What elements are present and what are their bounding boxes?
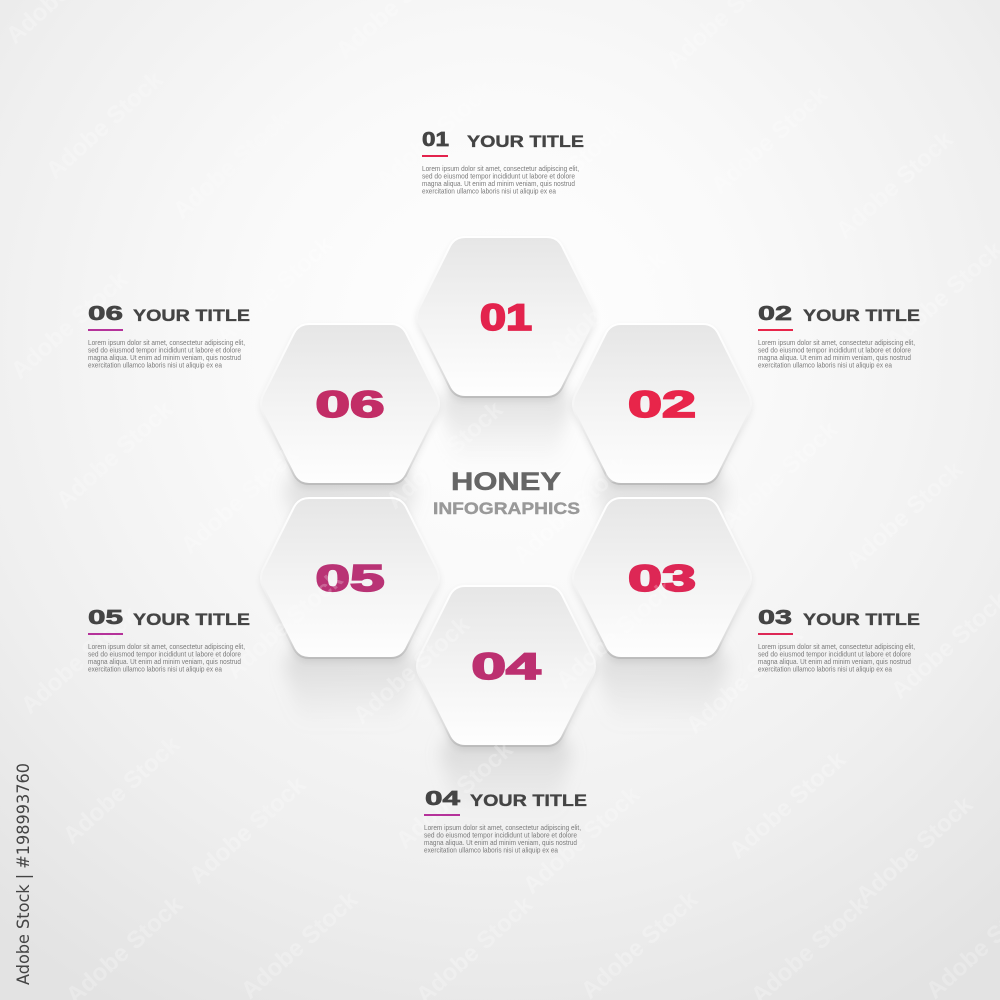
watermark pattern: Adobe Stock [544,246,672,364]
text block 05: Lorem ipsum dolor sit amet, consectetur adipiscing elit, [88,642,245,651]
text block 03 [758,607,920,674]
hexagon 06: 06 [316,384,384,425]
watermark pattern: Adobe Stock [16,601,144,719]
text block 05 [88,607,250,674]
heading: honey: HONEY [451,468,561,496]
text block 05: YOUR TITLE [133,611,250,629]
watermark pattern: Adobe Stock [831,126,959,244]
hexagon 05 [261,498,439,658]
watermark pattern: Adobe Stock [724,746,852,864]
hexagon 04 [417,586,595,746]
watermark pattern: Adobe Stock [58,731,186,849]
watermark pattern: Adobe Stock [221,566,349,684]
watermark pattern: Adobe Stock [184,771,312,889]
watermark pattern: Adobe Stock [391,736,519,854]
hexagon 06 [261,324,439,484]
text block 05: exercitation ullamco laboris nisi ut aliquip ex ea [88,664,222,674]
text block 03: 03 [758,607,792,629]
text block 02: YOUR TITLE [803,307,920,325]
text block 01: magna aliqua. Ut enim ad minim veniam, quis nostrud [422,179,575,188]
watermark pattern: Adobe Stock [211,231,339,349]
watermark pattern: Adobe Stock [841,456,969,574]
text block 06: YOUR TITLE [133,307,250,325]
hexagon 02: 02 [628,384,696,425]
text block 04: magna aliqua. Ut enim ad minim veniam, quis nostrud [424,838,577,847]
text block 06: magna aliqua. Ut enim ad minim veniam, quis nostrud [88,353,241,362]
center title [433,468,580,518]
hexagon 05: 05 [316,558,384,599]
subheading: infographics: INFOGRAPHICS [433,500,580,518]
text block 06: exercitation ullamco laboris nisi ut aliquip ex ea [88,360,222,370]
text block 02: magna aliqua. Ut enim ad minim veniam, quis nostrud [758,353,911,362]
text block 04: exercitation ullamco laboris nisi ut aliquip ex ea [424,846,558,854]
text block 03: YOUR TITLE [803,611,920,629]
text block 01: Lorem ipsum dolor sit amet, consectetur adipiscing elit, [422,164,579,173]
text block 02: 02 [758,303,792,325]
text block 04: Lorem ipsum dolor sit amet, consectetur adipiscing elit, [424,823,581,832]
text block 01 [422,129,584,196]
text block 04: YOUR TITLE [470,792,587,810]
hexagon 04: 04 [472,646,541,687]
watermark pattern: Adobe Stock [851,791,979,909]
text block 03: Lorem ipsum dolor sit amet, consectetur adipiscing elit, [758,642,915,651]
watermark pattern: Adobe Stock [6,266,134,384]
text block 06 [88,303,250,370]
watermark pattern: Adobe Stock [681,621,809,739]
watermark pattern: Adobe Stock [371,76,499,194]
text block 01: YOUR TITLE [467,133,584,151]
watermark pattern: Adobe Stock [381,396,509,514]
text block 06: sed do eiusmod tempor incididunt ut labore et dolore [88,346,241,354]
text block 04: sed do eiusmod tempor incididunt ut labore et dolore [424,830,577,840]
watermark pattern: Adobe Stock [168,106,296,224]
text block 06: 06 [88,303,123,325]
hexagon drop shadows [284,385,728,815]
watermark pattern: Adobe Stock [551,576,679,694]
hexagon 03 [573,498,751,658]
text block 01: exercitation ullamco laboris nisi ut aliquip ex ea [422,186,556,196]
text block 04: 04 [425,788,461,810]
hexagon 02 [573,324,751,484]
watermark pattern: Adobe Stock [51,396,179,514]
stock id side label: Adobe Stock | #198993760 [14,763,34,985]
text block 05: sed do eiusmod tempor incididunt ut labore et dolore [88,650,241,658]
watermark pattern: Adobe Stock [508,451,636,569]
text block 02: Lorem ipsum dolor sit amet, consectetur adipiscing elit, [758,338,915,347]
text block 06: Lorem ipsum dolor sit amet, consectetur adipiscing elit, [88,338,245,347]
text block 03: magna aliqua. Ut enim ad minim veniam, quis nostrud [758,657,911,666]
watermark pattern: Adobe Stock [501,116,629,234]
watermark pattern: Adobe Stock [41,66,169,184]
text block 02: exercitation ullamco laboris nisi ut aliquip ex ea [758,360,892,370]
watermark pattern: Adobe Stock [706,81,834,199]
text block 01: 01 [422,129,449,151]
text block 02 [758,303,920,370]
text block 05: 05 [88,607,123,629]
text block 02: sed do eiusmod tempor incididunt ut labore et dolore [758,346,911,354]
text block 03: sed do eiusmod tempor incididunt ut labore et dolore [758,650,911,658]
watermark pattern: Adobe Stock [348,611,476,729]
hexagon 01: 01 [480,297,532,338]
hexagon 01 [417,237,595,397]
watermark pattern: Adobe Stock [176,441,304,559]
watermark pattern: Adobe Stock [518,781,646,899]
text block 05: magna aliqua. Ut enim ad minim veniam, quis nostrud [88,657,241,666]
hexagon halos [261,240,751,749]
text block 04 [424,788,587,854]
text block 03: exercitation ullamco laboris nisi ut aliquip ex ea [758,664,892,674]
hexagon 03: 03 [628,558,696,599]
text block 01: sed do eiusmod tempor incididunt ut labore et dolore [422,172,575,180]
watermark pattern: Adobe Stock [716,416,844,534]
